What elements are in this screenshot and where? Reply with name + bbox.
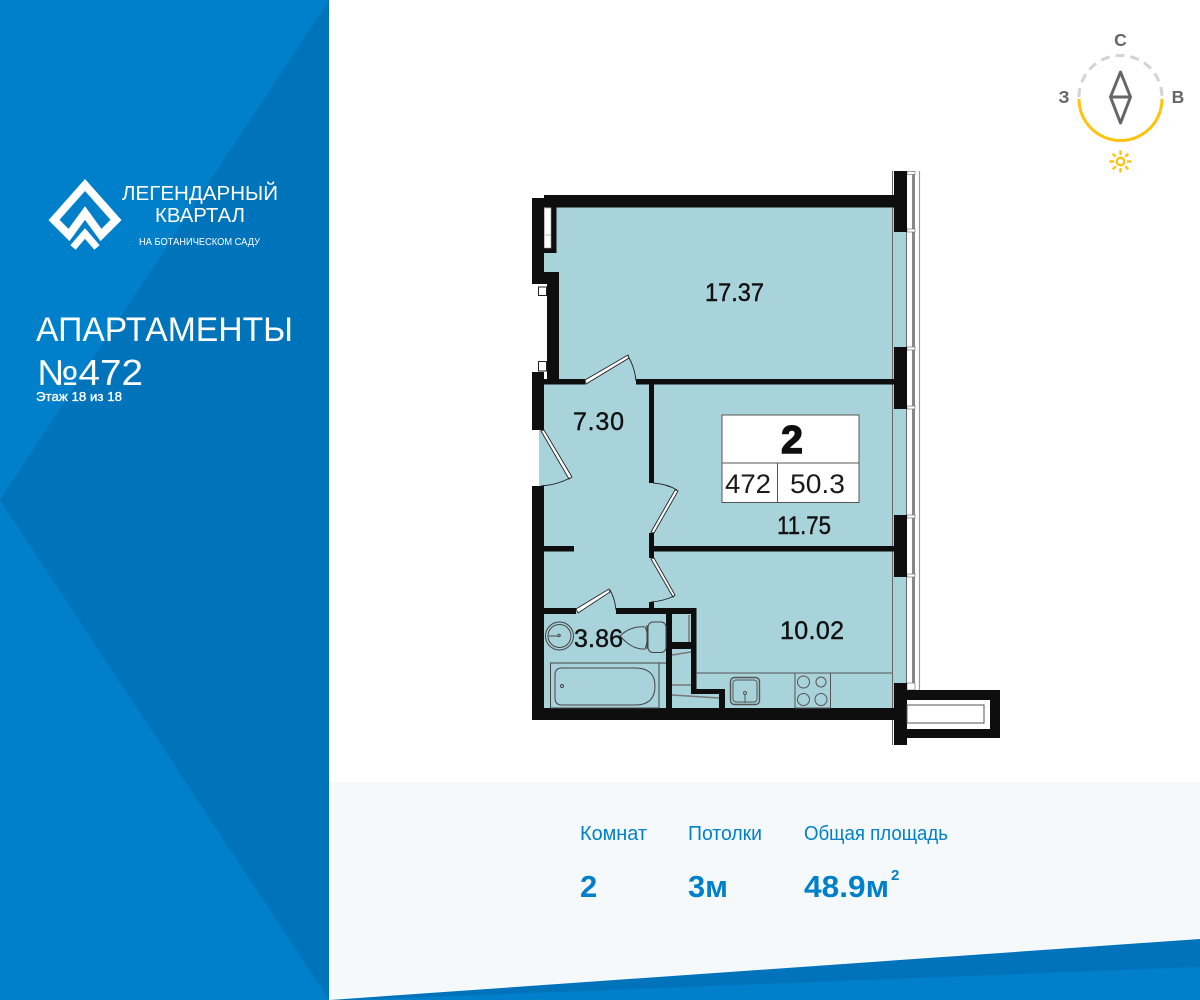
heading: apartment title (36, 311, 293, 404)
door: kitchen (651, 558, 675, 602)
window strip (892, 171, 920, 745)
compass letters (1059, 30, 1184, 107)
shaft details (672, 615, 719, 698)
outer wall brackets (538, 287, 546, 371)
room floors (539, 205, 907, 710)
balcony (907, 690, 1000, 738)
info box: 472 (725, 469, 771, 499)
heading: apartment title: АПАРТАМЕНТЫ (36, 311, 293, 349)
compass needle (1110, 72, 1130, 123)
stat: total area (804, 823, 948, 904)
logo wordmark (122, 181, 278, 248)
area: bathroom: 3.86 (574, 625, 623, 653)
info box: 2 (781, 419, 803, 462)
door: bathroom (576, 589, 616, 613)
compass letters: В (1172, 87, 1184, 107)
icon: sun (1110, 150, 1132, 172)
stat: ceilings: 3м (688, 869, 728, 904)
door: living room (585, 355, 636, 384)
kitchen counter (696, 673, 892, 708)
heading: apartment title: №472 (37, 352, 143, 393)
stat: rooms: 2 (580, 869, 597, 904)
door: entrance (541, 430, 572, 486)
area: bedroom: 11.75 (777, 512, 831, 540)
washbasin (546, 622, 574, 650)
stat: ceilings: Потолки (688, 823, 762, 845)
area: kitchen: 10.02 (780, 617, 844, 645)
walls (532, 171, 907, 745)
kitchen sink (730, 678, 760, 704)
niche window (544, 208, 551, 248)
panel: left blue sidebar (0, 0, 329, 1000)
stat: total area: 48.9м (804, 869, 889, 904)
area: hallway: 7.30 (573, 408, 624, 436)
hob (795, 673, 830, 708)
info box (722, 415, 859, 502)
logo wordmark: НА БОТАНИЧЕСКОМ САДУ (139, 237, 261, 248)
compass letters: С (1114, 30, 1127, 50)
stat: total area: Общая площадь (804, 823, 948, 845)
toilet (620, 622, 666, 652)
logo wordmark: ЛЕГЕНДАРНЫЙ (122, 181, 278, 205)
compass (1059, 30, 1184, 172)
compass letters: З (1059, 87, 1070, 107)
stat: rooms (580, 823, 647, 904)
stat: rooms: Комнат (580, 823, 647, 845)
compass ring (1079, 56, 1162, 140)
info box: 50.3 (790, 469, 845, 499)
logo: Легендарный Квартал (54, 181, 278, 248)
panel: bottom summary (329, 782, 1200, 1000)
logo wordmark: КВАРТАЛ (155, 205, 245, 227)
stat: total area: 2 (891, 867, 899, 884)
doors (541, 355, 678, 613)
bathtub (550, 663, 666, 708)
floor text: Этаж 18 из 18 (36, 389, 122, 404)
room areas (573, 279, 844, 653)
stat: ceilings (688, 823, 762, 904)
area: living room: 17.37 (705, 279, 764, 307)
floor plan (532, 171, 1000, 745)
door: bedroom (651, 483, 678, 533)
summary stats (580, 823, 948, 904)
bathroom fixtures (546, 622, 666, 708)
icon: logo chevrons (54, 185, 116, 248)
